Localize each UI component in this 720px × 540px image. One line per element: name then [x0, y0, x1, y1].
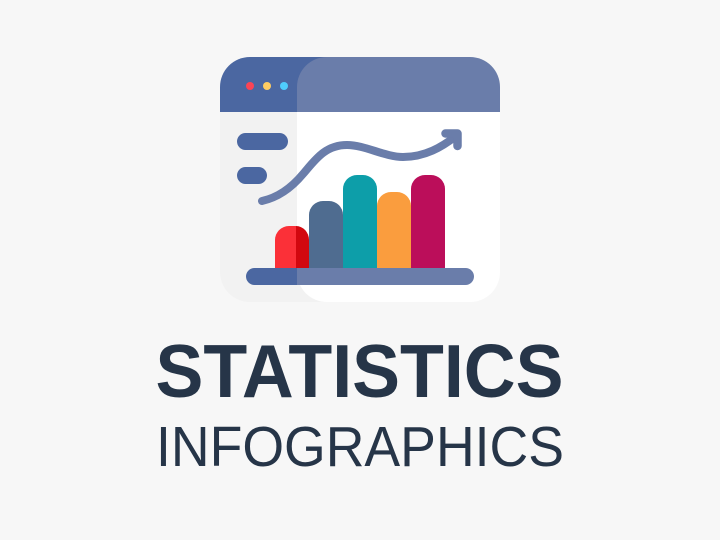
window front panel: [297, 112, 500, 302]
window front header: [297, 57, 500, 112]
window back panel: [220, 112, 340, 302]
bar chart: [275, 175, 445, 268]
shelf base: [246, 268, 474, 285]
sidebar pill short: [237, 167, 267, 184]
bar: magenta: [411, 175, 445, 268]
window back header: [220, 57, 330, 112]
bar: slate blue: [309, 201, 343, 268]
trend arrow: [262, 134, 458, 201]
subtitle: INFOGRAPHICS: [156, 415, 564, 479]
icon: statistics browser window: [220, 57, 500, 302]
bar: orange: [377, 192, 411, 268]
window control dots: [246, 82, 288, 90]
bar: dark red: [296, 226, 309, 268]
bar: teal: [343, 175, 377, 268]
bar: red: [275, 226, 296, 268]
title: STATISTICS: [156, 329, 564, 413]
sidebar pill long: [237, 133, 288, 150]
